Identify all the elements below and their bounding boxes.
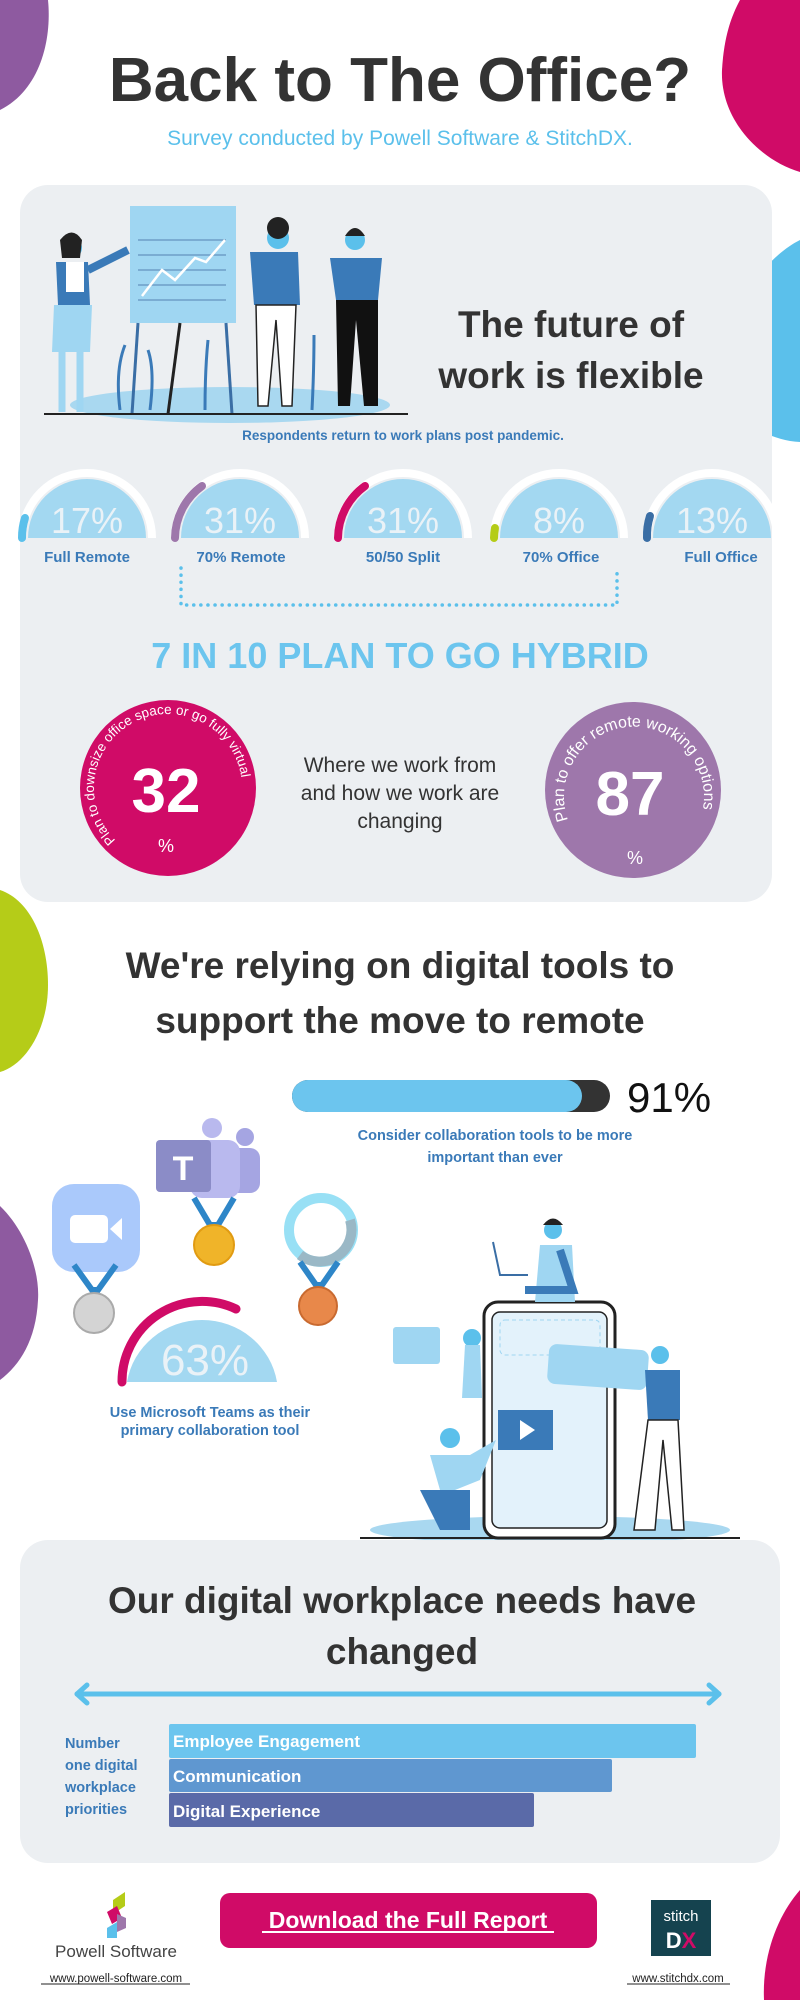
gauge: 63% teams — [122, 1301, 277, 1385]
text: where we work: Where we work from — [304, 754, 496, 777]
stat circle: 87%: % — [627, 848, 643, 868]
text: where we work: changing — [357, 810, 443, 833]
gauge: 63% teams: 63% — [161, 1336, 249, 1385]
heading: future of work — [437, 304, 704, 396]
caption: teams: Use Microsoft Teams as their — [110, 1405, 311, 1421]
label: priorities — [64, 1736, 138, 1818]
logo: stitchdx — [651, 1900, 711, 1956]
gauge: 50/50 split — [338, 473, 468, 566]
decorative blob: top-left purple — [0, 0, 49, 110]
gauge: 70% remote — [175, 473, 305, 566]
headline: hybrid: 7 IN 10 PLAN TO GO HYBRID — [151, 635, 649, 676]
stat circle: 87%: 87 — [596, 760, 664, 829]
text: where we work — [301, 754, 499, 833]
gauge: full office: 13% — [676, 500, 748, 541]
caption: teams: primary collaboration tool — [121, 1423, 299, 1439]
gauge: 70% office: 70% Office — [523, 549, 599, 566]
subtitle: Survey conducted by Powell Software & StitchDX. — [167, 127, 633, 150]
caption: collaboration tools — [358, 1128, 632, 1166]
caption: collaboration tools: Consider collaboration tools to be more — [358, 1128, 632, 1144]
heading: digital tools: We're relying on digital tools to — [126, 945, 674, 986]
stat circle: 87%: Plan to offer remote working options — [553, 716, 714, 822]
heading: future of work: The future of — [458, 304, 685, 345]
gauge: 50/50 split: 50/50 Split — [366, 549, 440, 566]
label: priorities: workplace — [64, 1780, 136, 1796]
heading: digital tools: support the move to remote — [155, 1000, 645, 1041]
gauge: 70% remote: 31% — [204, 500, 276, 541]
caption: teams — [110, 1405, 311, 1439]
decorative blob: bottom-right magenta — [764, 1890, 800, 2000]
illustration: team at flipchart — [44, 206, 408, 423]
gauge: 70% office: 8% — [533, 500, 585, 541]
decorative blob: left purple — [0, 1206, 38, 1380]
gauge: full remote — [22, 473, 152, 566]
logo: powell software: Powell Software — [55, 1942, 177, 1961]
heading: needs changed — [108, 1580, 696, 1672]
icon: teams with gold medal — [156, 1118, 260, 1265]
title: Back to The Office? — [109, 46, 691, 115]
panel: digital workplace needs — [20, 1540, 780, 1863]
stat circle: 32%: Plan to downsize office space or go fully virtual — [84, 706, 251, 846]
progress bar: 91%: 91% — [627, 1074, 711, 1121]
logo: stitchdx: DX — [666, 1928, 697, 1953]
button: download report — [220, 1893, 597, 1948]
bar chart: priorities — [169, 1724, 696, 1827]
text: where we work: and how we work are — [301, 782, 499, 805]
decorative blob: left green — [0, 890, 48, 1072]
heading: digital tools — [126, 945, 674, 1041]
decorative blob: top-right magenta — [722, 0, 800, 172]
heading: needs changed: Our digital workplace needs have — [108, 1580, 696, 1621]
link: stitchdx url: www.stitchdx.com — [631, 1973, 724, 1985]
gauge: 70% office — [494, 473, 624, 566]
panel: future of work — [18, 185, 772, 902]
bar chart: priorities: Communication — [173, 1767, 301, 1786]
bar chart: priorities: Digital Experience — [173, 1802, 320, 1821]
icon: webex with bronze medal — [289, 1198, 353, 1325]
gauge: 50/50 split: 31% — [367, 500, 439, 541]
gauge: full remote: Full Remote — [44, 549, 130, 566]
gauge: 70% remote: 70% Remote — [196, 549, 286, 566]
caption: respondents: Respondents return to work plans post pandemic. — [242, 428, 564, 443]
caption: collaboration tools: important than ever — [427, 1150, 563, 1166]
decorative blob: right blue — [722, 240, 800, 442]
icon: teams with gold medal: T — [173, 1150, 194, 1188]
bar chart: priorities: Employee Engagement — [173, 1732, 360, 1751]
link: powell url: www.powell-software.com — [49, 1973, 182, 1985]
heading: needs changed: changed — [326, 1631, 478, 1672]
dotted bracket — [181, 568, 617, 605]
gauge: full remote: 17% — [51, 500, 123, 541]
gauge: full office — [647, 473, 777, 566]
stat circle: 32%: 32 — [132, 757, 200, 826]
illustration: people around phone — [360, 1218, 740, 1544]
heading: future of work: work is flexible — [437, 355, 704, 396]
label: priorities: Number — [65, 1736, 120, 1752]
gauge: full office: Full Office — [684, 549, 758, 566]
label: priorities: one digital — [65, 1758, 138, 1774]
logo: stitchdx: stitch — [663, 1908, 699, 1925]
button: download report: Download the Full Report — [269, 1907, 548, 1933]
logo: powell software — [55, 1892, 177, 1961]
stat circle: 32%: % — [158, 836, 174, 856]
arrow: double-headed — [77, 1685, 719, 1703]
progress bar: 91% — [292, 1074, 711, 1121]
icon: zoom with silver medal — [52, 1184, 140, 1333]
label: priorities: priorities — [65, 1802, 127, 1818]
stat circle: 87% — [545, 702, 721, 878]
